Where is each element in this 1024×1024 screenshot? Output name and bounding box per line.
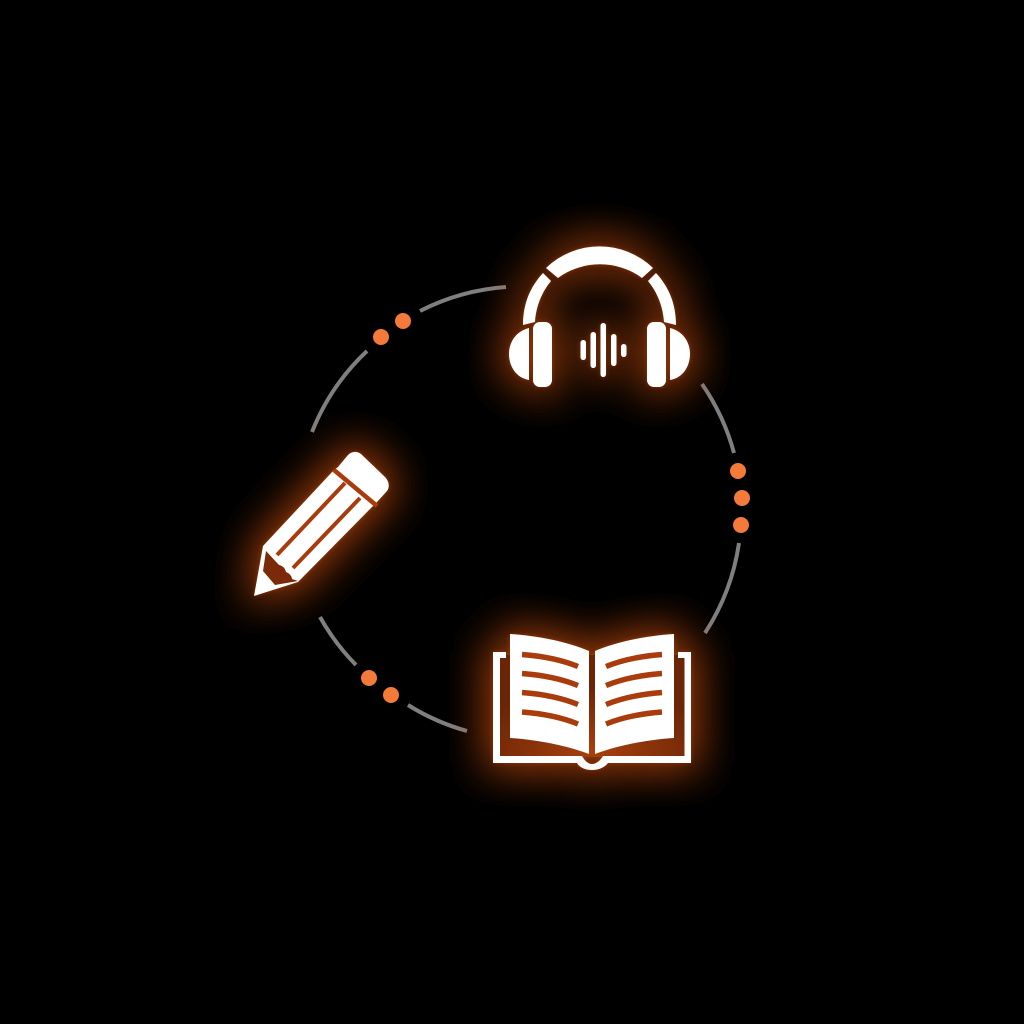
sound wave [580,323,626,377]
icon: pencil [254,452,389,596]
ferrule groove [334,470,377,506]
cycle ring arcs [312,287,739,731]
left ear cup [533,322,552,387]
book cover outline [493,652,691,770]
body grooves [277,483,360,568]
right page text lines [606,654,662,724]
icon: open book [493,634,691,770]
right page [595,634,674,754]
book cover and pages with glow [493,634,691,770]
left page [510,634,589,754]
headband right segment [648,273,676,325]
pencil lead cut [263,551,298,585]
headband left segment [523,273,551,325]
connector dots: reading to writing [361,670,399,703]
headband top segment [546,246,653,278]
connector dots: listening to reading [730,463,750,533]
book cover inner fill [500,655,685,757]
icon: headphones [509,246,690,387]
connector dots: writing to listening [373,313,411,345]
left page text lines [522,654,578,724]
right ear cup [647,322,666,387]
pencil silhouette with glow [254,452,389,596]
